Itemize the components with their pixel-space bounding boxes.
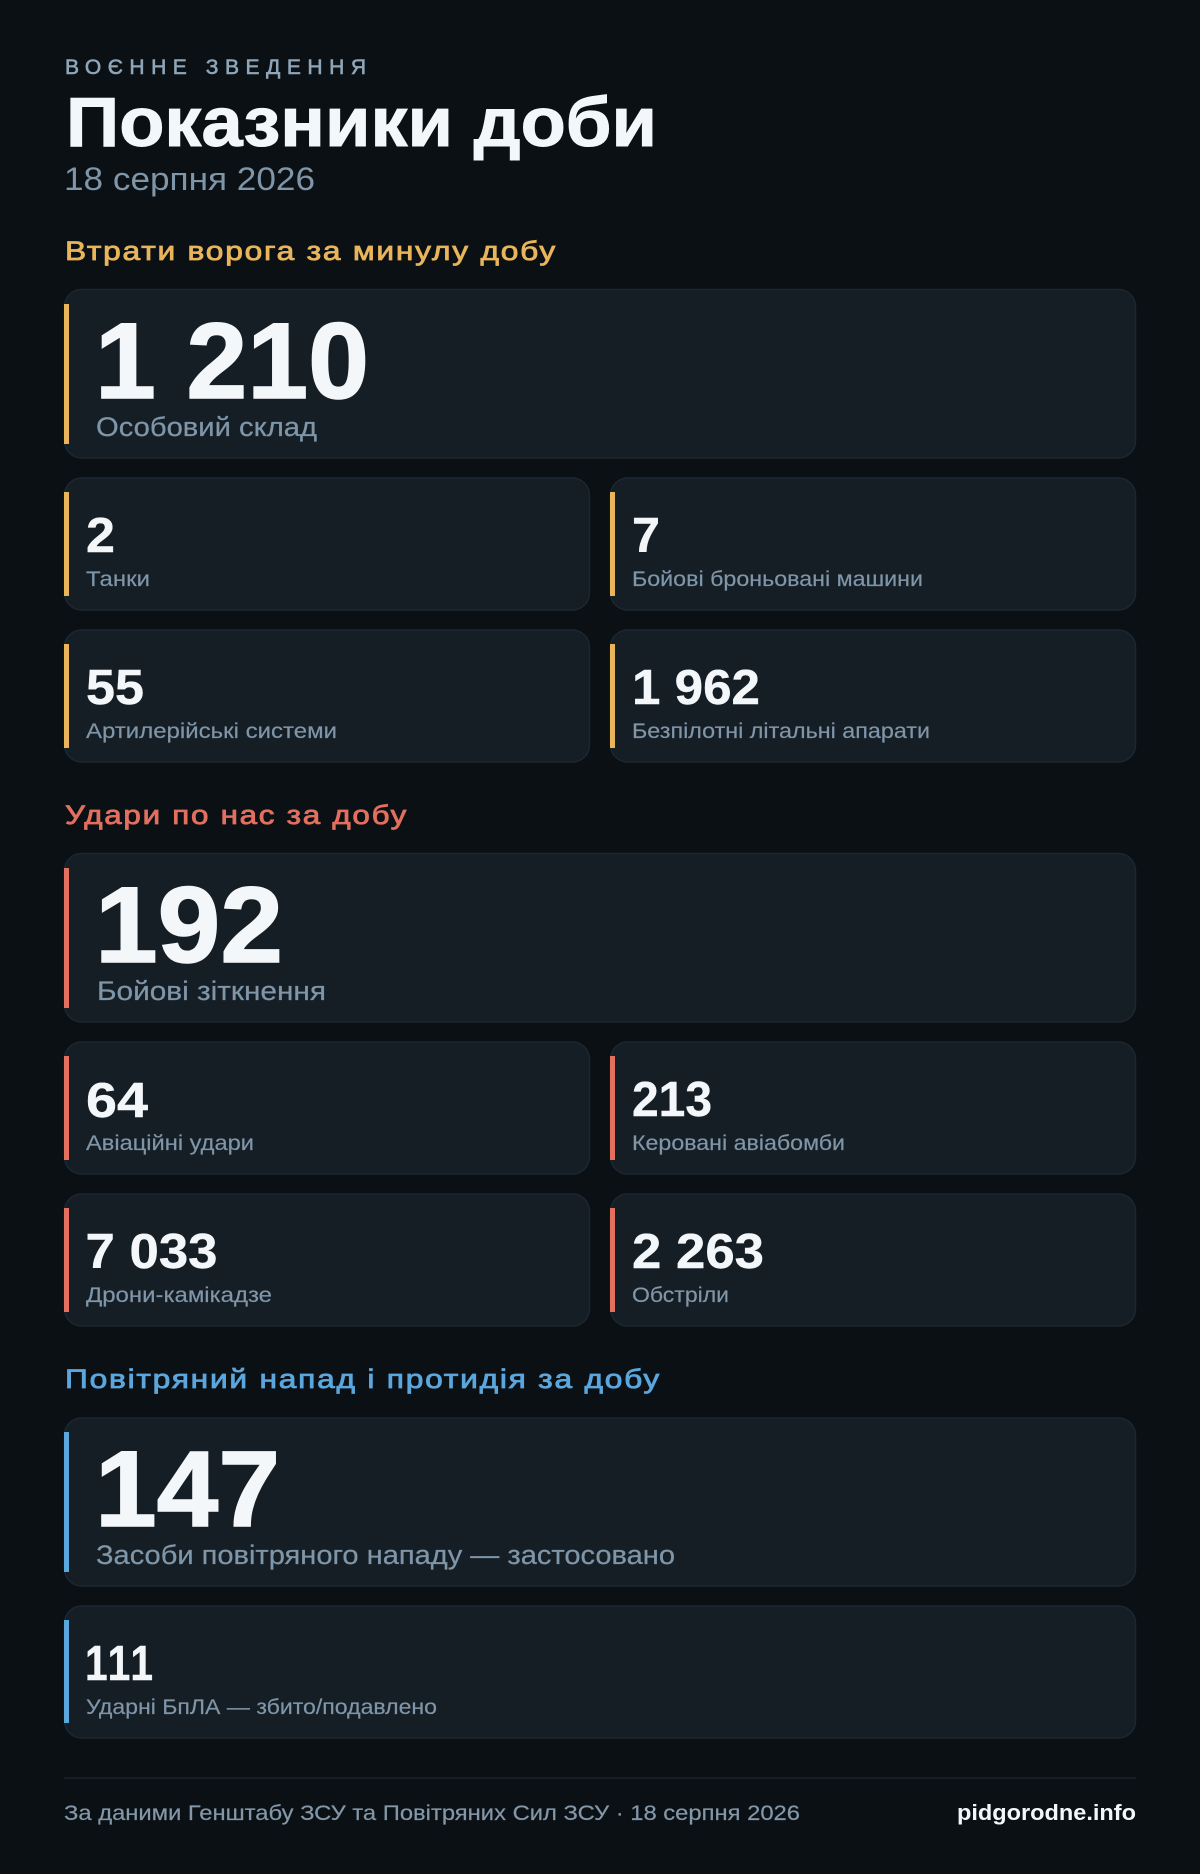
label: Безпілотні літальні апарати [632, 719, 930, 743]
label: Танки [86, 567, 150, 591]
label: Ударні БпЛА — збито/подавлено [86, 1695, 437, 1719]
accent bar [64, 1620, 69, 1723]
value: 7 [632, 508, 660, 563]
source note: За даними Генштабу ЗСУ та Повітряних Сил ЗСУ · 18 серпня 2026 [64, 1801, 800, 1825]
header [64, 56, 657, 197]
title: Показники доби [66, 83, 657, 161]
section: enemy losses [64, 236, 1136, 762]
accent bar [64, 1208, 69, 1312]
value: 64 [86, 1073, 149, 1128]
accent bar [64, 304, 69, 444]
label: Артилерійські системи [86, 719, 337, 743]
eyebrow: ВОЄННЕ ЗВЕДЕННЯ [65, 56, 366, 79]
card: artillery [64, 630, 590, 762]
label: Особовий склад [96, 412, 318, 442]
label: Дрони-камікадзе [86, 1283, 272, 1307]
accent bar [64, 1432, 69, 1572]
value: 192 [95, 864, 283, 985]
label: Бойові броньовані машини [632, 567, 923, 591]
section: strikes [64, 800, 1136, 1326]
heading: Повітряний напад і протидія за добу [65, 1364, 661, 1394]
label: Авіаційні удари [86, 1131, 254, 1155]
card: shelling [610, 1194, 1136, 1326]
accent bar [64, 644, 69, 748]
label: Бойові зіткнення [97, 976, 326, 1006]
value: 213 [632, 1072, 712, 1127]
heading: Втрати ворога за минулу добу [65, 236, 557, 266]
card: drones [610, 630, 1136, 762]
accent bar [610, 644, 615, 748]
value: 147 [95, 1428, 280, 1549]
card: strike UAVs [64, 1606, 1136, 1738]
card: tanks [64, 478, 590, 610]
footer [64, 1778, 1136, 1825]
card: guided bombs [610, 1042, 1136, 1174]
site name: pidgorodne.info [957, 1800, 1136, 1825]
value: 2 [86, 508, 115, 563]
label: Засоби повітряного нападу — застосовано [96, 1540, 675, 1570]
value: 2 263 [632, 1224, 764, 1279]
value: 7 033 [86, 1224, 218, 1279]
accent bar [64, 1056, 69, 1160]
accent bar [610, 492, 615, 596]
accent bar [64, 492, 69, 596]
value: 1 962 [632, 660, 760, 715]
value: 55 [86, 660, 144, 715]
accent bar [610, 1208, 615, 1312]
card: kamikaze drones [64, 1194, 590, 1326]
label: Керовані авіабомби [632, 1131, 845, 1155]
accent bar [64, 868, 69, 1008]
label: Обстріли [632, 1283, 729, 1307]
date: 18 серпня 2026 [64, 161, 315, 197]
hero card: air attack means [64, 1418, 1136, 1586]
value: 111 [85, 1636, 153, 1691]
hero card: clashes [64, 854, 1136, 1022]
card: air strikes [64, 1042, 590, 1174]
section: air attack [64, 1364, 1136, 1738]
value: 1 210 [95, 300, 369, 421]
accent bar [610, 1056, 615, 1160]
heading: Удари по нас за добу [65, 800, 408, 830]
hero card: personnel [64, 290, 1136, 458]
card: armoured vehicles [610, 478, 1136, 610]
